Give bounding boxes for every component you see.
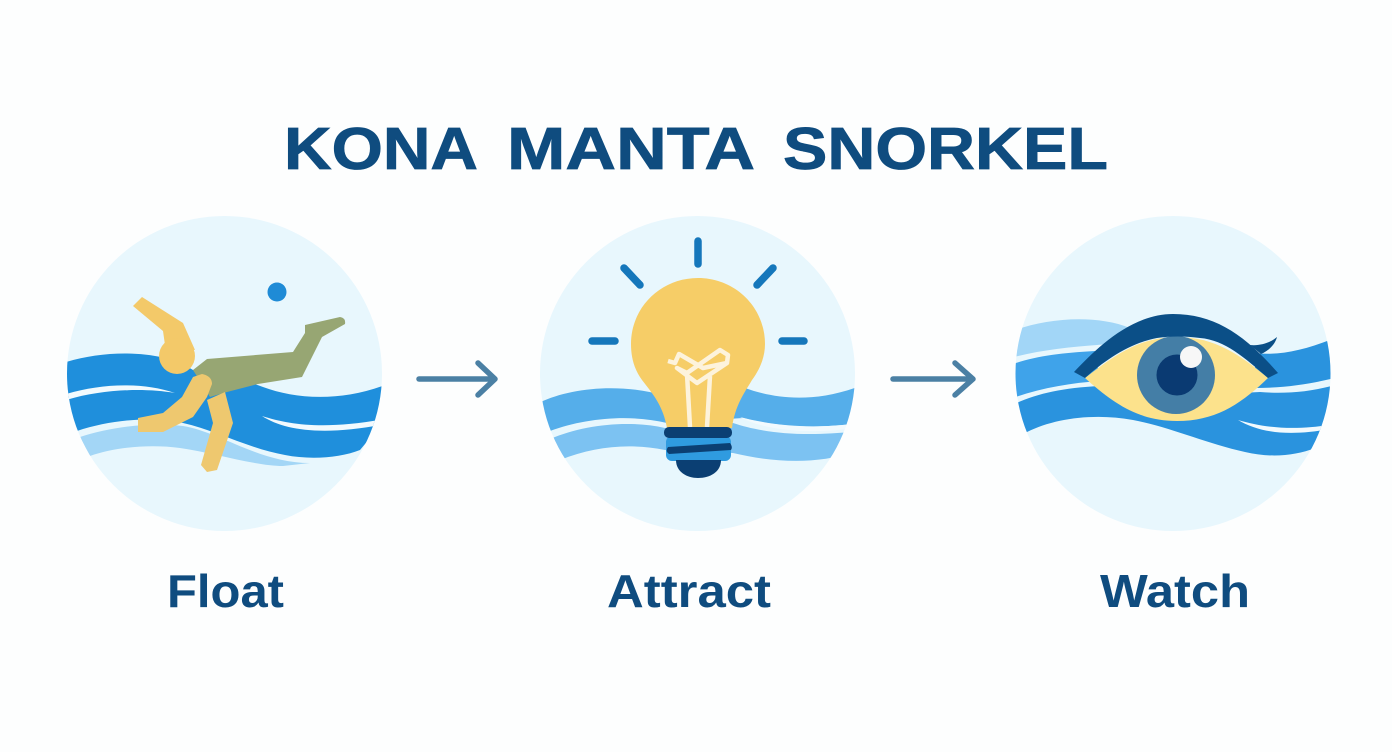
swimmer lower leg	[201, 392, 233, 472]
float waves	[60, 353, 385, 466]
eyebrow lid	[1074, 314, 1278, 378]
arrow: attract to watch	[893, 363, 973, 395]
panel: float	[60, 216, 385, 531]
highlight	[1180, 346, 1202, 368]
ball	[268, 282, 286, 302]
infographic	[67, 127, 1330, 608]
bulb rays	[592, 241, 804, 341]
title: KONA	[284, 116, 478, 182]
swimmer raised arm	[133, 297, 195, 350]
swimmer front arm	[138, 374, 212, 432]
title: SNORKEL	[783, 116, 1108, 182]
icon: eye	[1074, 314, 1278, 421]
attract waves	[535, 386, 860, 461]
panel: attract	[535, 216, 860, 531]
icon: light bulb	[592, 241, 804, 478]
eye white	[1085, 337, 1268, 421]
eyelash	[1250, 337, 1277, 354]
bulb glass	[631, 278, 765, 428]
icon: swimmer	[133, 282, 345, 472]
float background circle	[67, 216, 382, 531]
iris	[1137, 336, 1215, 414]
attract background circle	[540, 216, 855, 531]
title	[284, 116, 1108, 182]
swimmer legs and torso	[193, 317, 345, 397]
watch background circle	[1016, 216, 1330, 531]
panel: watch	[1010, 216, 1335, 531]
label: attract: Attract	[607, 565, 771, 617]
arrow: float to attract	[419, 363, 495, 395]
filament	[668, 350, 728, 427]
label: watch: Watch	[1100, 565, 1250, 617]
swimmer head	[159, 338, 195, 374]
pupil	[1156, 354, 1198, 396]
title: MANTA	[507, 116, 755, 182]
label: float: Float	[167, 565, 284, 617]
bulb base	[664, 427, 732, 478]
watch waves	[1010, 319, 1335, 455]
